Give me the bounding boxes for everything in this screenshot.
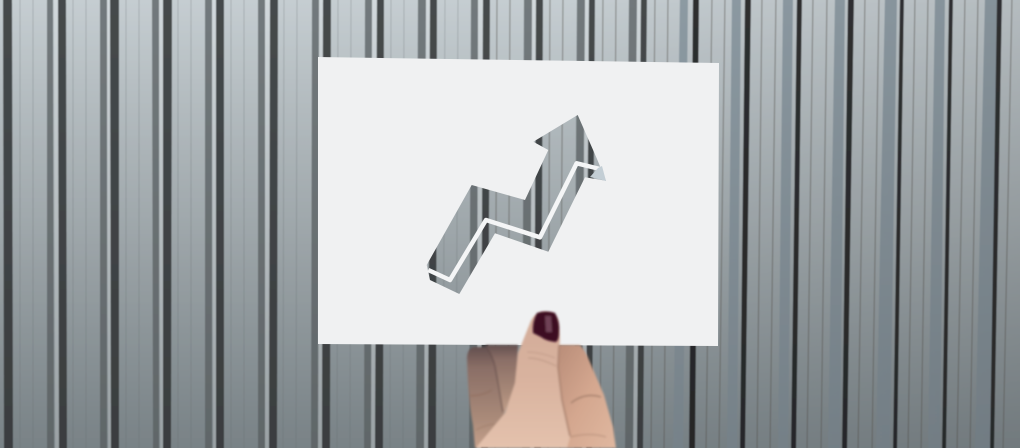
second finger: [485, 345, 518, 414]
thumb right-side shadow: [558, 345, 570, 436]
faint vertical corrugation lines: [20, 0, 458, 448]
nail polish: [533, 312, 559, 342]
dark stripes: [3, 0, 647, 448]
right palm: [556, 345, 616, 448]
paper strip inside the arrow: [428, 163, 600, 280]
gap between fingers: [487, 348, 503, 412]
knuckle creases: [470, 352, 606, 437]
blue-gray stripes: [673, 0, 997, 448]
paper sheet with arrow-shaped hole: [318, 57, 719, 346]
thumb: [476, 312, 570, 448]
left finger: [467, 347, 504, 448]
light highlights beside the stripes: [54, 0, 641, 448]
hand holding the paper: [467, 312, 616, 448]
arrow tip shelf: [590, 166, 606, 181]
gray stripes: [47, 0, 637, 448]
